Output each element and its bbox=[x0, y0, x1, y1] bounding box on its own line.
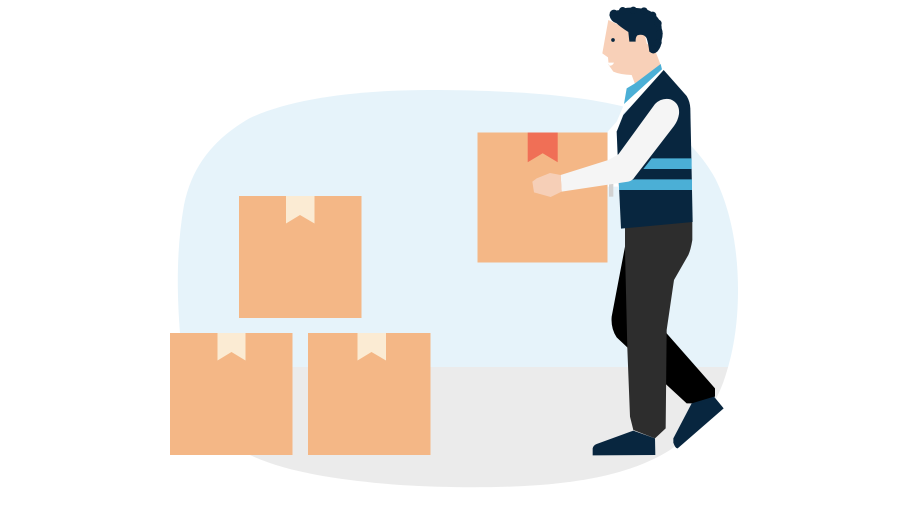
back shoe bbox=[673, 397, 724, 448]
hair bbox=[609, 7, 663, 53]
box: carried by worker bbox=[478, 132, 608, 262]
box tape bbox=[218, 333, 246, 360]
mouth bbox=[608, 63, 614, 66]
vest bbox=[617, 70, 693, 229]
box: bottom right bbox=[308, 333, 430, 455]
shirt collar bbox=[624, 64, 662, 104]
neck and face bbox=[602, 20, 661, 84]
illustration: worker stacking boxes bbox=[170, 6, 738, 488]
front shoe bbox=[593, 431, 655, 455]
arm bbox=[561, 99, 679, 192]
red tape bbox=[528, 132, 558, 162]
hand bbox=[532, 173, 562, 197]
front leg bbox=[625, 222, 692, 438]
eye bbox=[611, 38, 615, 42]
box: bottom left bbox=[170, 333, 292, 455]
box tape bbox=[286, 196, 314, 224]
back leg bbox=[612, 247, 715, 403]
box: top of stack bbox=[239, 196, 362, 318]
vest stripe upper bbox=[643, 158, 692, 169]
floor bbox=[250, 367, 728, 488]
vest stripe lower bbox=[619, 179, 692, 190]
box tape bbox=[358, 333, 386, 360]
white shirt front bbox=[608, 69, 664, 187]
worker legs bbox=[593, 222, 724, 455]
background blob bbox=[170, 85, 745, 492]
belt tab bbox=[609, 184, 613, 197]
worker upper body bbox=[532, 7, 693, 229]
